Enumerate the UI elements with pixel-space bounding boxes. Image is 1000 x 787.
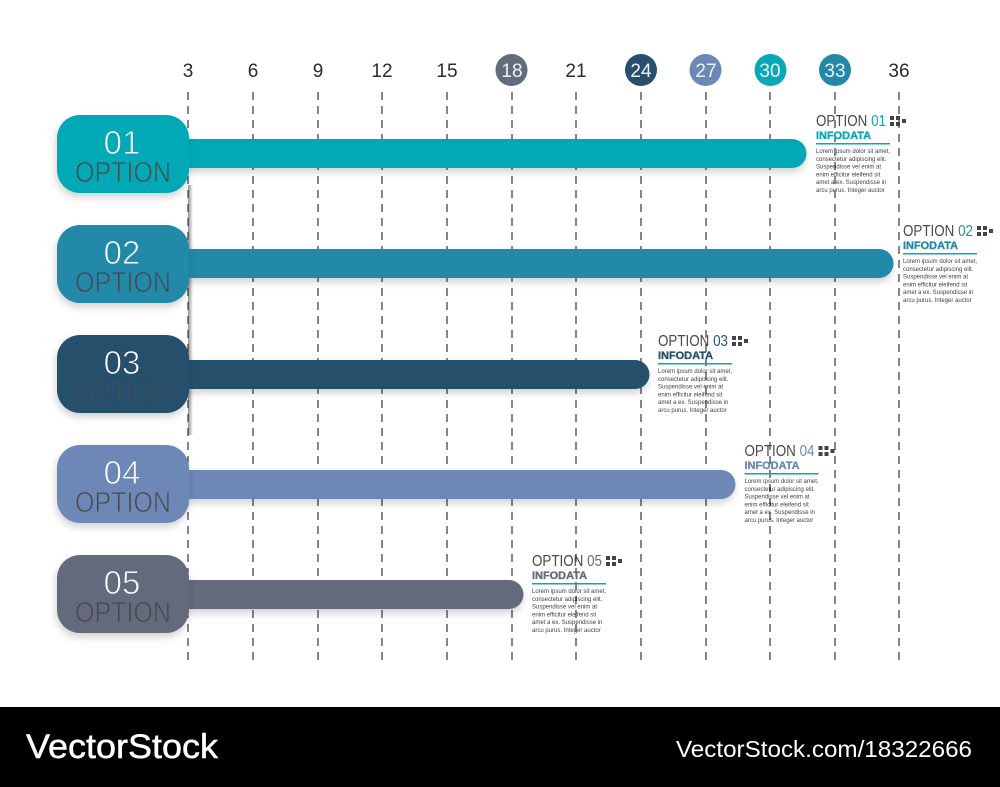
row 01: bar and tab: OPTION xyxy=(75,157,171,189)
row 03: bar and tab: 03 xyxy=(104,344,140,381)
info block 05: enim efficitur eleifend sit xyxy=(532,612,597,618)
dashed grid lines xyxy=(188,92,899,660)
info block 05: arcu purus. Integer auctor xyxy=(532,628,601,634)
info block 04 xyxy=(744,443,834,524)
info block 04: INFODATA xyxy=(744,460,800,472)
info block 05: OPTION 05 xyxy=(532,553,602,570)
info block 02: OPTION 02 xyxy=(903,223,973,240)
info block 01: Suspendisse vel enim at xyxy=(816,165,881,171)
info block 03: amet a ex. Suspendisse in xyxy=(658,400,728,406)
info block 03: consectetur adipiscing elit. xyxy=(658,377,729,383)
row 04: bar and tab xyxy=(57,445,736,523)
info block 04: enim efficitur eleifend sit xyxy=(744,502,809,508)
info block 01: amet a ex. Suspendisse in xyxy=(816,180,886,186)
info block 02 xyxy=(903,223,993,304)
info block 04: Suspendisse vel enim at xyxy=(744,495,810,501)
info block 02: consectetur adipiscing elit. xyxy=(903,267,974,273)
info block 03: arcu purus. Integer auctor xyxy=(658,408,727,414)
row 01: bar and tab: 01 xyxy=(104,124,140,161)
axis scale with month markers: 30 xyxy=(759,61,781,82)
info block 05: INFODATA xyxy=(532,570,587,582)
footer watermark bar: VectorStock.com/18322666 xyxy=(676,736,972,762)
info block 05: Suspendisse vel enim at xyxy=(532,605,597,611)
info block 02: Lorem ipsum dolor sit amet, xyxy=(903,259,977,265)
info block 02: amet a ex. Suspendisse in xyxy=(903,290,973,296)
axis scale with month markers xyxy=(183,54,910,86)
info block 04: Lorem ipsum dolor sit amet, xyxy=(744,479,819,485)
row 02: bar and tab: OPTION xyxy=(75,267,171,299)
axis scale with month markers: 18 xyxy=(501,61,523,82)
axis scale with month markers: 3 xyxy=(183,61,193,82)
info block 01: enim efficitur eleifend sit xyxy=(816,172,881,178)
info block 03: OPTION 03 xyxy=(658,333,728,350)
row 02: bar and tab: 02 xyxy=(104,234,140,271)
info block 02: arcu purus. Integer auctor xyxy=(903,298,972,304)
axis scale with month markers: 36 xyxy=(888,61,910,82)
axis scale with month markers: 24 xyxy=(630,61,652,82)
row 03: bar and tab: OPTION xyxy=(75,377,171,409)
info block 03 xyxy=(658,333,748,414)
axis scale with month markers: 27 xyxy=(695,61,717,82)
axis scale with month markers: 9 xyxy=(313,61,323,82)
info block 03: enim efficitur eleifend sit xyxy=(658,392,723,398)
info block 04: amet a ex. Suspendisse in xyxy=(744,510,815,516)
footer watermark bar xyxy=(0,707,1000,787)
info block 01: consectetur adipiscing elit. xyxy=(816,157,887,163)
row 04: bar and tab: OPTION xyxy=(75,487,171,519)
info block 05 xyxy=(532,553,622,634)
info block 05: consectetur adipiscing elit. xyxy=(532,597,603,603)
row 04: bar and tab: 04 xyxy=(104,454,140,491)
info block 01: INFODATA xyxy=(816,130,871,142)
info block 05: amet a ex. Suspendisse in xyxy=(532,620,602,626)
row 03: bar and tab xyxy=(57,335,650,413)
info block 02: INFODATA xyxy=(903,240,958,252)
row 05: bar and tab: 05 xyxy=(104,564,140,601)
footer watermark bar: VectorStock xyxy=(26,728,219,766)
info block 02: Suspendisse vel enim at xyxy=(903,275,968,281)
info block 02: enim efficitur eleifend sit xyxy=(903,282,968,288)
row 05: bar and tab xyxy=(57,555,524,633)
axis scale with month markers: 33 xyxy=(824,61,846,82)
info block 05: Lorem ipsum dolor sit amet, xyxy=(532,589,606,595)
info block 01 xyxy=(816,113,906,194)
info block 01: Lorem ipsum dolor sit amet, xyxy=(816,149,890,155)
axis scale with month markers: 12 xyxy=(371,61,393,82)
info block 03: Suspendisse vel enim at xyxy=(658,385,723,391)
info block 04: arcu purus. Integer auctor xyxy=(744,518,813,524)
axis scale with month markers: 21 xyxy=(565,61,587,82)
info block 04: OPTION 04 xyxy=(744,443,815,460)
axis scale with month markers: 6 xyxy=(248,61,258,82)
row 01: bar and tab xyxy=(57,115,806,193)
info block 04: consectetur adipiscing elit. xyxy=(744,487,815,493)
info block 01: OPTION 01 xyxy=(816,113,886,130)
info block 03: INFODATA xyxy=(658,350,713,362)
info block 03: Lorem ipsum dolor sit amet, xyxy=(658,369,732,375)
info block 01: arcu purus. Integer auctor xyxy=(816,188,885,194)
row 02: bar and tab xyxy=(57,225,894,303)
row 05: bar and tab: OPTION xyxy=(75,597,171,629)
axis scale with month markers: 15 xyxy=(436,61,458,82)
